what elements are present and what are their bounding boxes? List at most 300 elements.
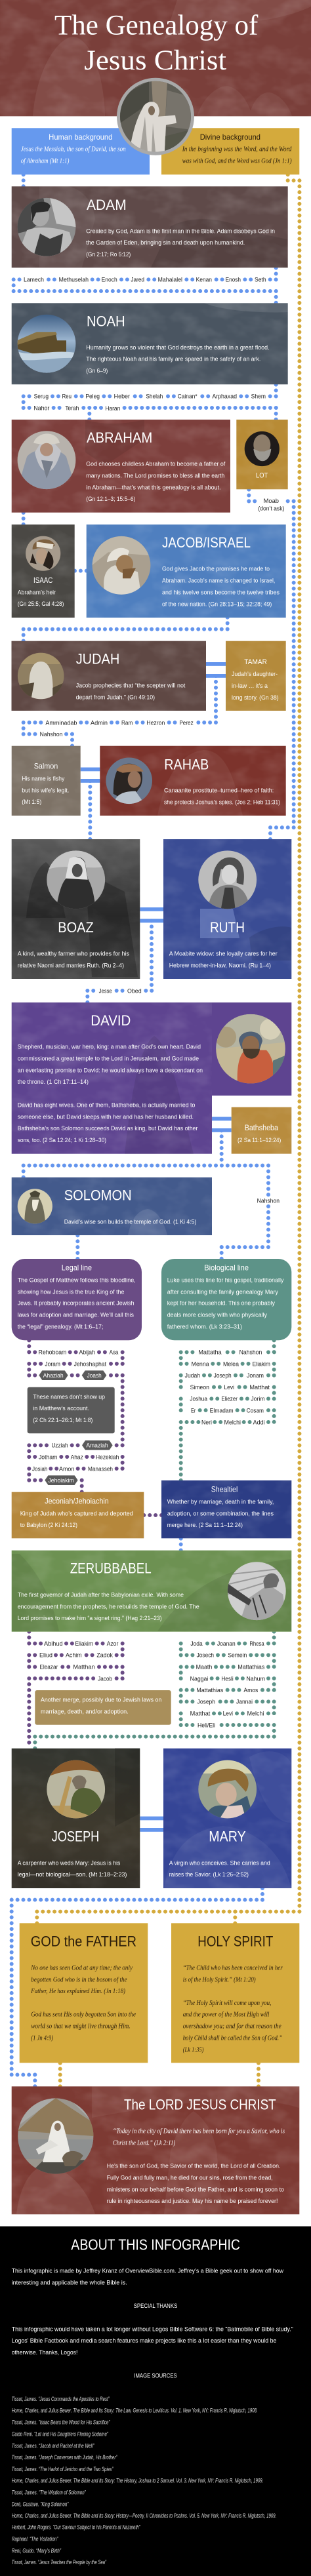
Shealtiel description: Whether by marriage, death in the family, [167, 1498, 274, 1505]
icon: Noah ark portrait [17, 314, 76, 373]
connector: biological line names upper: Eliezer [221, 1396, 238, 1403]
connector: biological line names lower: Levi [223, 1711, 233, 1718]
connector: legal line names lower: Zadok [96, 1652, 113, 1659]
Biological line description: after consulting the family genealogy Mary [167, 1288, 278, 1296]
Salmon heading: Salmon [34, 762, 58, 771]
Legal line description: the “legal” genealogy. (Mt 1:6–17; [18, 1323, 103, 1330]
panel: ABRAHAM [12, 420, 230, 513]
connector: Boaz to David generations: Jesse [99, 987, 112, 995]
connector: Noah to Abraham generations: Nahor [33, 405, 49, 412]
connector: Adam to Noah generations: Enosh [226, 277, 241, 284]
JOSEPH description: legal—not biological—son. (Mt 1:18–2:23) [18, 1871, 127, 1878]
TAMAR description: Judah’s daughter- [232, 671, 278, 678]
Shealtiel description: merge here. (2 Sa 11:1–12:24) [167, 1522, 243, 1529]
connector: Adam to Noah generations: Mahalalel [158, 277, 182, 284]
title: Jesus Christ [84, 45, 226, 76]
TAMAR description: in-law … it’s a [232, 683, 268, 690]
DAVID description: commissioned a great temple to the Lord in Jerusalem, and God made [18, 1056, 199, 1063]
Bathsheba reference: (2 Sa 11:1–12:24) [238, 1137, 281, 1144]
footer intro text: This infographic is made by Jeffrey Kranz of OverviewBible.com. Jeffrey’s a Bible geek out to show off how [12, 2267, 283, 2274]
ABRAHAM description: (Gn 12:1–3; 15:5–6) [86, 496, 135, 503]
Biological line description: deals more closely with who physically [167, 1312, 267, 1319]
Legal line description [18, 1277, 136, 1330]
DAVID description: the throne. (1 Ch 17:11–14) [18, 1079, 89, 1086]
connector: biological line names lower: Semein [228, 1652, 247, 1659]
Biological line description [167, 1277, 284, 1330]
connector: biological line names lower: Melchi [247, 1711, 264, 1718]
HOLY SPIRIT verses: and the power of the Most High will [183, 2011, 270, 2019]
JACOB/ISRAEL heading: JACOB/ISRAEL [162, 534, 251, 551]
Jesus Christ heading: The LORD JESUS CHRIST [124, 2097, 276, 2113]
HOLY SPIRIT verses: holy Child shall be called the Son of God.” [183, 2034, 282, 2042]
icon: David portrait [215, 1014, 285, 1084]
connector: biological line names upper: Melea [223, 1360, 239, 1368]
panel: about this infographic footer [0, 2226, 311, 2576]
Legal line description: The Gospel of Matthew follows this bloodline, [18, 1277, 136, 1284]
panel: MARY [163, 1749, 291, 1888]
panel: Bathsheba [232, 1107, 291, 1154]
Salmon description: but his wife’s legit. [22, 787, 69, 795]
DAVID description: sons, too. (2 Sa 12:24; 1 Ki 1:28–30) [18, 1137, 106, 1144]
panel: LOT [236, 420, 288, 489]
NOAH heading: NOAH [87, 313, 125, 329]
connector: Judah to Salmon generations: Ram [121, 719, 133, 726]
callout: names missing from Matthew: (2 Ch 22:1–26:1; Mt 1:8) [33, 1417, 93, 1424]
connector: legal line names upper: Hezekiah [96, 1454, 119, 1461]
Salmon description: His name is fishy [22, 776, 64, 783]
connector: Adam to Noah generations: Kenan [196, 277, 212, 284]
MARY description [169, 1859, 270, 1878]
image sources list: Reni, Guido. “Mary’s Birth” [12, 2547, 62, 2554]
MARY description: A virgin who conceives. She carries and [169, 1859, 270, 1867]
image sources list: Tissot, James. “Joseph Converses with Judah, His Brother” [12, 2454, 117, 2461]
panel: RUTH [163, 839, 291, 979]
connector: biological line names lower: Nahum [246, 1675, 265, 1682]
RAHAB description [164, 787, 280, 806]
ABRAHAM description: in Abraham—that’s what this genealogy is all about. [86, 484, 221, 491]
divine background verse: was with God, and the Word was God (Jn 1:1) [182, 158, 292, 165]
connector: biological line names upper: Mattatha [198, 1349, 222, 1357]
icon: portrait of Jesus at top [117, 78, 194, 155]
connector: Noah to Abraham generations: Shem [251, 393, 266, 401]
JUDAH description [76, 683, 186, 702]
RUTH description: A Moabite widow: she loyally cares for her [169, 951, 278, 958]
divine background verse [182, 146, 292, 165]
panel: NOAH [12, 303, 288, 384]
title: The Genealogy of [54, 10, 259, 41]
Bathsheba heading: Bathsheba [245, 1124, 279, 1132]
panel: Jeconiah/Jehoiachin [12, 1492, 144, 1538]
connector: biological line names upper: Joshua [190, 1396, 208, 1403]
footer intro text [12, 2267, 283, 2286]
connector: biological line names lower: Naggai [190, 1675, 208, 1682]
divine background heading: Divine background [200, 132, 260, 142]
JACOB/ISRAEL description: and his twelve sons become the twelve tribes [162, 589, 280, 596]
Jesus Christ verse [113, 2128, 285, 2147]
panel: The LORD JESUS CHRIST [12, 2086, 299, 2214]
connector: legal line names upper: Josiah [32, 1465, 47, 1473]
image sources heading: IMAGE SOURCES [134, 2373, 177, 2380]
image sources list: Tissot, James. “The Wisdom of Solomon” [12, 2489, 86, 2495]
connector: Judah to Salmon generations: Amminadab [45, 719, 77, 726]
connector: merge dots between Jeconiah and Shealtiel [144, 1515, 181, 1551]
GOD the FATHER verses: God has sent His only begotten Son into the [31, 2011, 136, 2019]
hexagon tag: Joash: Joash [87, 1372, 102, 1379]
connector: biological line names upper: Neri [201, 1419, 212, 1426]
ADAM description [86, 228, 275, 258]
connector: Noah to Abraham generations: Reu [62, 393, 72, 401]
panel: human background [12, 128, 150, 174]
header banner [0, 0, 311, 116]
connector: Noah to Abraham generations: Terah [65, 405, 79, 412]
Legal line description: laws for adoption and marriage. We’ll call this [18, 1312, 134, 1319]
icon: Ruth portrait [198, 850, 257, 909]
special thanks text: This infographic would have taken a lot longer without Logos Bible Software 6: the “Batmobile of Bible study.” [12, 2326, 293, 2333]
connector: biological line names lower: Matthat [190, 1711, 211, 1718]
DAVID description: Bathsheba’s son Solomon succeeds David as king, but David has other [18, 1125, 198, 1132]
connector: biological line names upper: Elmadam [210, 1407, 234, 1414]
TAMAR description: long story. (Gn 38) [232, 694, 279, 702]
MARY heading: MARY [209, 1829, 246, 1845]
ADAM description: (Gn 2:17; Ro 5:12) [86, 251, 131, 258]
ZERUBBABEL description: Lord promises to make him “a signet ring.” (Hag 2:21–23) [18, 1615, 162, 1622]
NOAH description: Humanity grows so violent that God destroys the earth in a great flood. [86, 344, 270, 351]
Biological line description: fathered whom. (Lk 3:23–31) [167, 1323, 242, 1330]
DAVID description: Shepherd, musician, war hero, king: a man after God’s own heart. David [18, 1044, 201, 1051]
connector: Adam to Noah generations: Seth [255, 277, 266, 284]
connector: Noah to Abraham generations [24, 385, 276, 420]
GOD the FATHER verses: begotten God who is in the bosom of the [31, 1977, 127, 1984]
image sources list: Herbert, John Rogers. “Our Saviour Subject to his Parents at Nazareth” [12, 2524, 140, 2531]
Jeconiah description: to Babylon (2 Ki 24:12) [20, 1522, 77, 1529]
human background verse: of Abraham (Mt 1:1) [21, 158, 70, 165]
panel: ZERUBBABEL [12, 1551, 291, 1632]
ABRAHAM description: God chooses childless Abraham to become a father of [86, 461, 226, 468]
connector: biological line names lower: Amos [243, 1687, 259, 1694]
connector: Noah to Abraham generations: Cainan* [178, 393, 197, 401]
callout: another merge: Another merge, possibly due to Jewish laws on [41, 1697, 161, 1704]
panel: ISAAC [12, 525, 75, 618]
Jeconiah heading: Jeconiah/Jehoiachin [45, 1496, 109, 1505]
ISAAC description [18, 589, 64, 608]
RAHAB heading: RAHAB [164, 756, 209, 772]
connector: biological line names upper: Matthat [249, 1384, 270, 1391]
connector: legal line names lower: Abihud [44, 1640, 63, 1648]
icon: Judah portrait [17, 652, 64, 700]
panel: RAHAB [100, 746, 286, 816]
Jesus Christ verse: “Today in the city of David there has been born for you a Savior, who is [113, 2128, 285, 2135]
connector: Noah to Abraham generations: Heber [114, 393, 130, 401]
BOAZ description: relative Naomi and marries Ruth. (Ru 2–4) [18, 962, 124, 969]
SOLOMON description: David’s wise son builds the temple of God. (1 Ki 4:5) [64, 1218, 196, 1225]
HOLY SPIRIT verses [183, 1965, 283, 2053]
connector: Adam to Noah generations: Jared [131, 277, 144, 284]
icon: Rahab portrait [106, 757, 153, 804]
connector: Boaz to David generations [87, 921, 152, 1002]
JACOB/ISRAEL description: God gives Jacob the promises he made to [162, 566, 270, 573]
connector: legal line names upper: Abijah [79, 1349, 95, 1357]
connector: biological line names lower: Joda [190, 1640, 203, 1648]
NOAH description: The righteous Noah and his family are spared in the safety of an ark. [86, 356, 260, 363]
NOAH description: (Gn 6–9) [86, 368, 108, 375]
connector: biological line names upper: Jonam [247, 1372, 264, 1379]
connector: legal line names upper: Amon [59, 1465, 74, 1473]
connector: biological line names lower: Mattathias [196, 1687, 224, 1694]
footer heading: ABOUT THIS INFOGRAPHIC [71, 2236, 240, 2253]
image sources list: Tissot, James. “The Harlot of Jericho and the Two Spies” [12, 2466, 114, 2472]
callout: names missing from Matthew: in Matthew’s account. [33, 1405, 89, 1412]
callout: another merge: marriage, death, and/or adoption. [41, 1708, 129, 1715]
connector: Adam to Noah generations: Lamech [24, 277, 44, 284]
ISAAC description: Abraham’s heir [18, 589, 56, 596]
human background heading: Human background [49, 132, 112, 142]
Salmon description: (Mt 1:5) [22, 799, 41, 806]
connector: legal line names upper [29, 1340, 123, 1492]
JACOB/ISRAEL description: Abraham. Jacob’s name is changed to Israel, [162, 578, 275, 585]
ABRAHAM heading: ABRAHAM [87, 429, 152, 446]
BOAZ heading: BOAZ [58, 919, 94, 936]
special thanks text: Logos’ Bible Factbook and media search features make projects like this a lot easier than they would be [12, 2337, 276, 2345]
icon: Zerubbabel portrait [227, 1562, 286, 1621]
Salmon description [22, 776, 69, 806]
connector: Judah to Salmon generations [24, 676, 216, 839]
connector: legal line names upper: Jotham [39, 1454, 57, 1461]
connector: legal line names lower: Eleazar [39, 1664, 58, 1671]
connector: biological line names lower: Maath [196, 1664, 212, 1671]
gold divine line connector [37, 174, 300, 2086]
JUDAH description: Jacob prophecies that “the scepter will not [76, 683, 186, 690]
connector: biological line names lower: Mattathias [238, 1664, 265, 1671]
MARY description: raises the Savior. (Lk 1:26–2:52) [169, 1871, 249, 1878]
TAMAR description [232, 671, 279, 702]
DAVID description: an everlasting promise to David: he would always have a descendant on [18, 1067, 203, 1074]
image sources list: Guido Reni. “Lot and His Daughters Fleeing Sodome” [12, 2430, 109, 2437]
connector: Lot, Moab and blue line to Ruth: Moab [264, 498, 279, 505]
RAHAB description: Canaanite prostitute–turned–hero of faith: [164, 787, 274, 795]
connector: Noah to Abraham generations: Arphaxad [212, 393, 237, 401]
connector: legal line names lower: Eliud [39, 1652, 52, 1659]
connector: legal line names lower: Eliakim [75, 1640, 93, 1648]
image sources list: Tissot, James. “Isaac Bears the Wood for His Sacrifice” [12, 2419, 110, 2426]
connector: Noah to Abraham generations: Haran [105, 405, 120, 412]
connector: legal line names upper: Asa [110, 1349, 119, 1357]
marriage bars: Joseph and Mary [140, 1816, 163, 1832]
special thanks text [12, 2326, 293, 2356]
image sources list: Raphael. “The Visitation” [12, 2536, 58, 2543]
divine background verse: In the beginning was the Word, and the Word [182, 146, 292, 153]
panel: Biological line [161, 1259, 291, 1340]
marriage bars: Judah and Tamar [206, 662, 226, 678]
panel: Shealtiel [161, 1480, 291, 1538]
connector: legal line names lower: Azor [107, 1640, 118, 1648]
icon: Jacob portrait [92, 536, 151, 595]
marriage bars: David and Bathsheba [212, 1117, 232, 1132]
connector: biological line names upper: Levi [224, 1384, 234, 1391]
RUTH heading: RUTH [210, 919, 245, 936]
connector: biological line names upper: Cosam [247, 1407, 264, 1414]
panel: JACOB/ISRAEL [87, 525, 286, 618]
DAVID description: someone else, but David sleeps with her and has her husband killed. [18, 1114, 194, 1121]
connector: biological line names lower [35, 1632, 274, 1749]
connector: legal line names upper: Uzziah [51, 1442, 68, 1450]
SOLOMON heading: SOLOMON [64, 1187, 132, 1204]
connector: biological line names upper [181, 1340, 274, 1480]
connector: Adam to Noah generations: Methuselah [59, 277, 89, 284]
Jeconiah description: King of Judah who’s captured and deported [20, 1510, 133, 1517]
connector: legal line names upper: Joram [45, 1360, 60, 1368]
HOLY SPIRIT verses: overshadow you; and for that reason the [183, 2023, 281, 2031]
HOLY SPIRIT verses: is of the Holy Spirit.” (Mt 1:20) [183, 1977, 256, 1984]
image sources list: Tissot, James. “Jesus Commands the Apostles to Rest” [12, 2396, 110, 2402]
panel: BOAZ [12, 839, 140, 979]
TAMAR heading: TAMAR [244, 658, 267, 666]
connector: biological line names lower: Heli/Eli [197, 1722, 215, 1729]
panel: GOD the FATHER [20, 1923, 148, 2063]
icon: Mary portrait [198, 1760, 257, 1819]
panel: TAMAR [226, 641, 286, 711]
connector: Boaz to David generations: Obed [127, 987, 142, 995]
hexagon tag: Ahaziah: Ahaziah [43, 1372, 64, 1379]
Jesus Christ description: ministers on our behalf before God the Father, and is coming soon to [107, 2186, 284, 2193]
panel: ADAM [12, 184, 288, 268]
JACOB/ISRAEL description [162, 566, 280, 608]
Biological line description: Luke uses this line for his gospel, traditionally [167, 1277, 284, 1284]
image sources list: Tissot, James. “Jesus Teaches the People by the Sea” [12, 2559, 107, 2566]
BOAZ description [18, 951, 129, 969]
Jesus Christ description: rule in righteousness and justice. May his name be praised forever! [107, 2198, 278, 2205]
connector: legal line names lower: Matthan [73, 1664, 95, 1671]
JACOB/ISRAEL description: of the new nation. (Gn 28:13–15; 32:28; 49) [162, 601, 272, 608]
Jeconiah description [20, 1510, 133, 1529]
connector: Mary line around to Christ [12, 1888, 262, 2086]
marriage bars: Boaz and Ruth [140, 907, 163, 922]
image sources list: Tissot, James. “Jacob and Rachel at the Well” [12, 2442, 94, 2449]
Biological line description: kept for her household. This one probably [167, 1300, 275, 1307]
panel: SOLOMON [12, 1178, 212, 1235]
connector: biological line names upper: Addi [253, 1419, 265, 1426]
JUDAH description: depart from Judah.” (Gn 49:10) [76, 694, 155, 702]
connector: Adam to Noah generations [14, 174, 276, 303]
connector: Noah to Abraham generations: Shelah [146, 393, 163, 401]
DAVID description [18, 1044, 203, 1144]
footer intro text: interesting and applicable the whole Bible is. [12, 2279, 127, 2286]
callout: names missing from Matthew [28, 1387, 115, 1433]
RUTH description: Hebrew mother-in-law, Naomi. (Ru 1–4) [169, 962, 271, 969]
hexagon tag: Amaziah [82, 1440, 113, 1450]
GOD the FATHER verses [30, 1965, 136, 2042]
connector: biological line names upper: Judah [185, 1372, 200, 1379]
connector: biological line names upper: Joseph [214, 1372, 232, 1379]
human background verse [21, 146, 126, 165]
Jesus Christ verse: Christ the Lord.” (Lk 2:11) [113, 2139, 176, 2147]
connector: biological line names upper: Jorim [251, 1396, 265, 1403]
ZERUBBABEL description [18, 1591, 199, 1622]
Legal line heading: Legal line [62, 1263, 92, 1272]
ADAM description: Created by God, Adam is the first man in the Bible. Adam disobeys God in [86, 228, 275, 235]
connector: David to Solomon and Nahshon branch [24, 1130, 280, 1259]
callout: another merge [35, 1690, 171, 1725]
hexagon tag: Jehoiakim: Jehoiakim [48, 1477, 74, 1484]
Jesus Christ description: He’s the son of God, the Savior of the world, the Lord of all Creation. [107, 2163, 280, 2170]
connector: biological line names lower: Jannai [236, 1699, 253, 1706]
GOD the FATHER verses: world so that we might live through Him. [31, 2023, 131, 2031]
human background verse: Jesus the Messiah, the son of David, the son [21, 146, 126, 153]
connector: legal line names upper: Manasseh [88, 1465, 113, 1473]
RUTH description [169, 951, 278, 969]
special thanks heading: SPECIAL THANKS [134, 2303, 177, 2310]
icon: Joseph portrait [47, 1760, 106, 1819]
DAVID description: David has eight wives. One of them, Bathsheba, is actually married to [18, 1102, 195, 1109]
GOD the FATHER verses: (1 Jn 4:9) [31, 2034, 54, 2042]
ADAM description: the Garden of Eden, bringing sin and death upon humankind. [86, 239, 245, 247]
connector: biological line names lower: Joanan [217, 1640, 236, 1648]
icon: Isaac portrait [26, 536, 61, 571]
HOLY SPIRIT verses: (Lk 1:35) [183, 2046, 204, 2053]
connector: biological line names lower: Josech [197, 1652, 214, 1659]
connector: legal line names upper: Rehoboam [39, 1349, 66, 1357]
connector: biological line names upper: Er [191, 1407, 196, 1414]
connector: biological line names upper: Simeon [190, 1384, 209, 1391]
GOD the FATHER heading: GOD the FATHER [31, 1933, 136, 1950]
panel: JUDAH [12, 641, 206, 711]
ZERUBBABEL heading: ZERUBBABEL [70, 1560, 152, 1576]
Shealtiel description: adoption, or some combination, the lines [167, 1510, 274, 1517]
ZERUBBABEL description: encouragement from the prophets, he rebuilds the temple of God. The [18, 1603, 199, 1610]
panel: divine background [161, 128, 299, 174]
Shealtiel description [167, 1498, 274, 1529]
JOSEPH description: A carpenter who weds Mary: Jesus is his [18, 1859, 121, 1867]
panel: Legal line [12, 1259, 142, 1340]
connector: Judah to Salmon generations: Nahshon [40, 731, 62, 738]
special thanks text: otherwise. Thanks, Logos! [12, 2349, 77, 2356]
connector: legal line names upper: Ahaz [71, 1454, 83, 1461]
Jesus Christ description: Fully God and fully man, he died for our sins, rose from the dead, [107, 2175, 273, 2182]
NOAH description [86, 344, 270, 375]
connector: Noah to Abraham generations: Peleg [85, 393, 100, 401]
connector: Noah to Abraham generations: Serug [34, 393, 49, 401]
ABRAHAM description: many nations. The Lord promises to bless all the earth [86, 473, 224, 480]
connector: biological line names upper: Melchi [224, 1419, 241, 1426]
connector: Lot, Moab and blue line to Ruth [24, 490, 294, 839]
HOLY SPIRIT heading: HOLY SPIRIT [197, 1933, 273, 1950]
panel: Salmon [12, 746, 81, 816]
panel: HOLY SPIRIT [171, 1923, 299, 2063]
JOSEPH heading: JOSEPH [52, 1829, 99, 1845]
connector: biological line names upper: Nahshon [239, 1349, 262, 1357]
GOD the FATHER verses: No one has seen God at any time; the only [30, 1965, 133, 1972]
Jesus Christ description [107, 2163, 284, 2205]
panel: JOSEPH [12, 1748, 140, 1888]
hexagon tag: Jehoiakim [45, 1475, 78, 1485]
Biological line heading: Biological line [204, 1263, 249, 1272]
ISAAC heading: ISAAC [33, 577, 52, 585]
connector: legal line names lower: Achim [66, 1652, 82, 1659]
ADAM heading: ADAM [87, 197, 127, 213]
connector: legal line names upper: Jehoshaphat [74, 1360, 106, 1368]
connector: legal line names lower [29, 1632, 123, 1749]
connector: Adam to Noah generations: Enoch [102, 277, 117, 284]
connector: biological line names upper: Menna [192, 1360, 209, 1368]
connector: Lot, Moab and blue line to Ruth: (don’t ask) [258, 505, 284, 512]
connector: Judah to Salmon generations: Hezron [146, 719, 165, 726]
panel: DAVID [12, 1002, 291, 1154]
icon: Boaz portrait [47, 850, 106, 909]
icon: Abraham portrait [17, 431, 76, 490]
hexagon tag: Ahaziah [39, 1370, 68, 1380]
BOAZ description: A kind, wealthy farmer who provides for his [18, 951, 129, 958]
callout: names missing from Matthew: These names don’t show up [33, 1393, 105, 1400]
icon: Adam portrait [17, 197, 76, 256]
